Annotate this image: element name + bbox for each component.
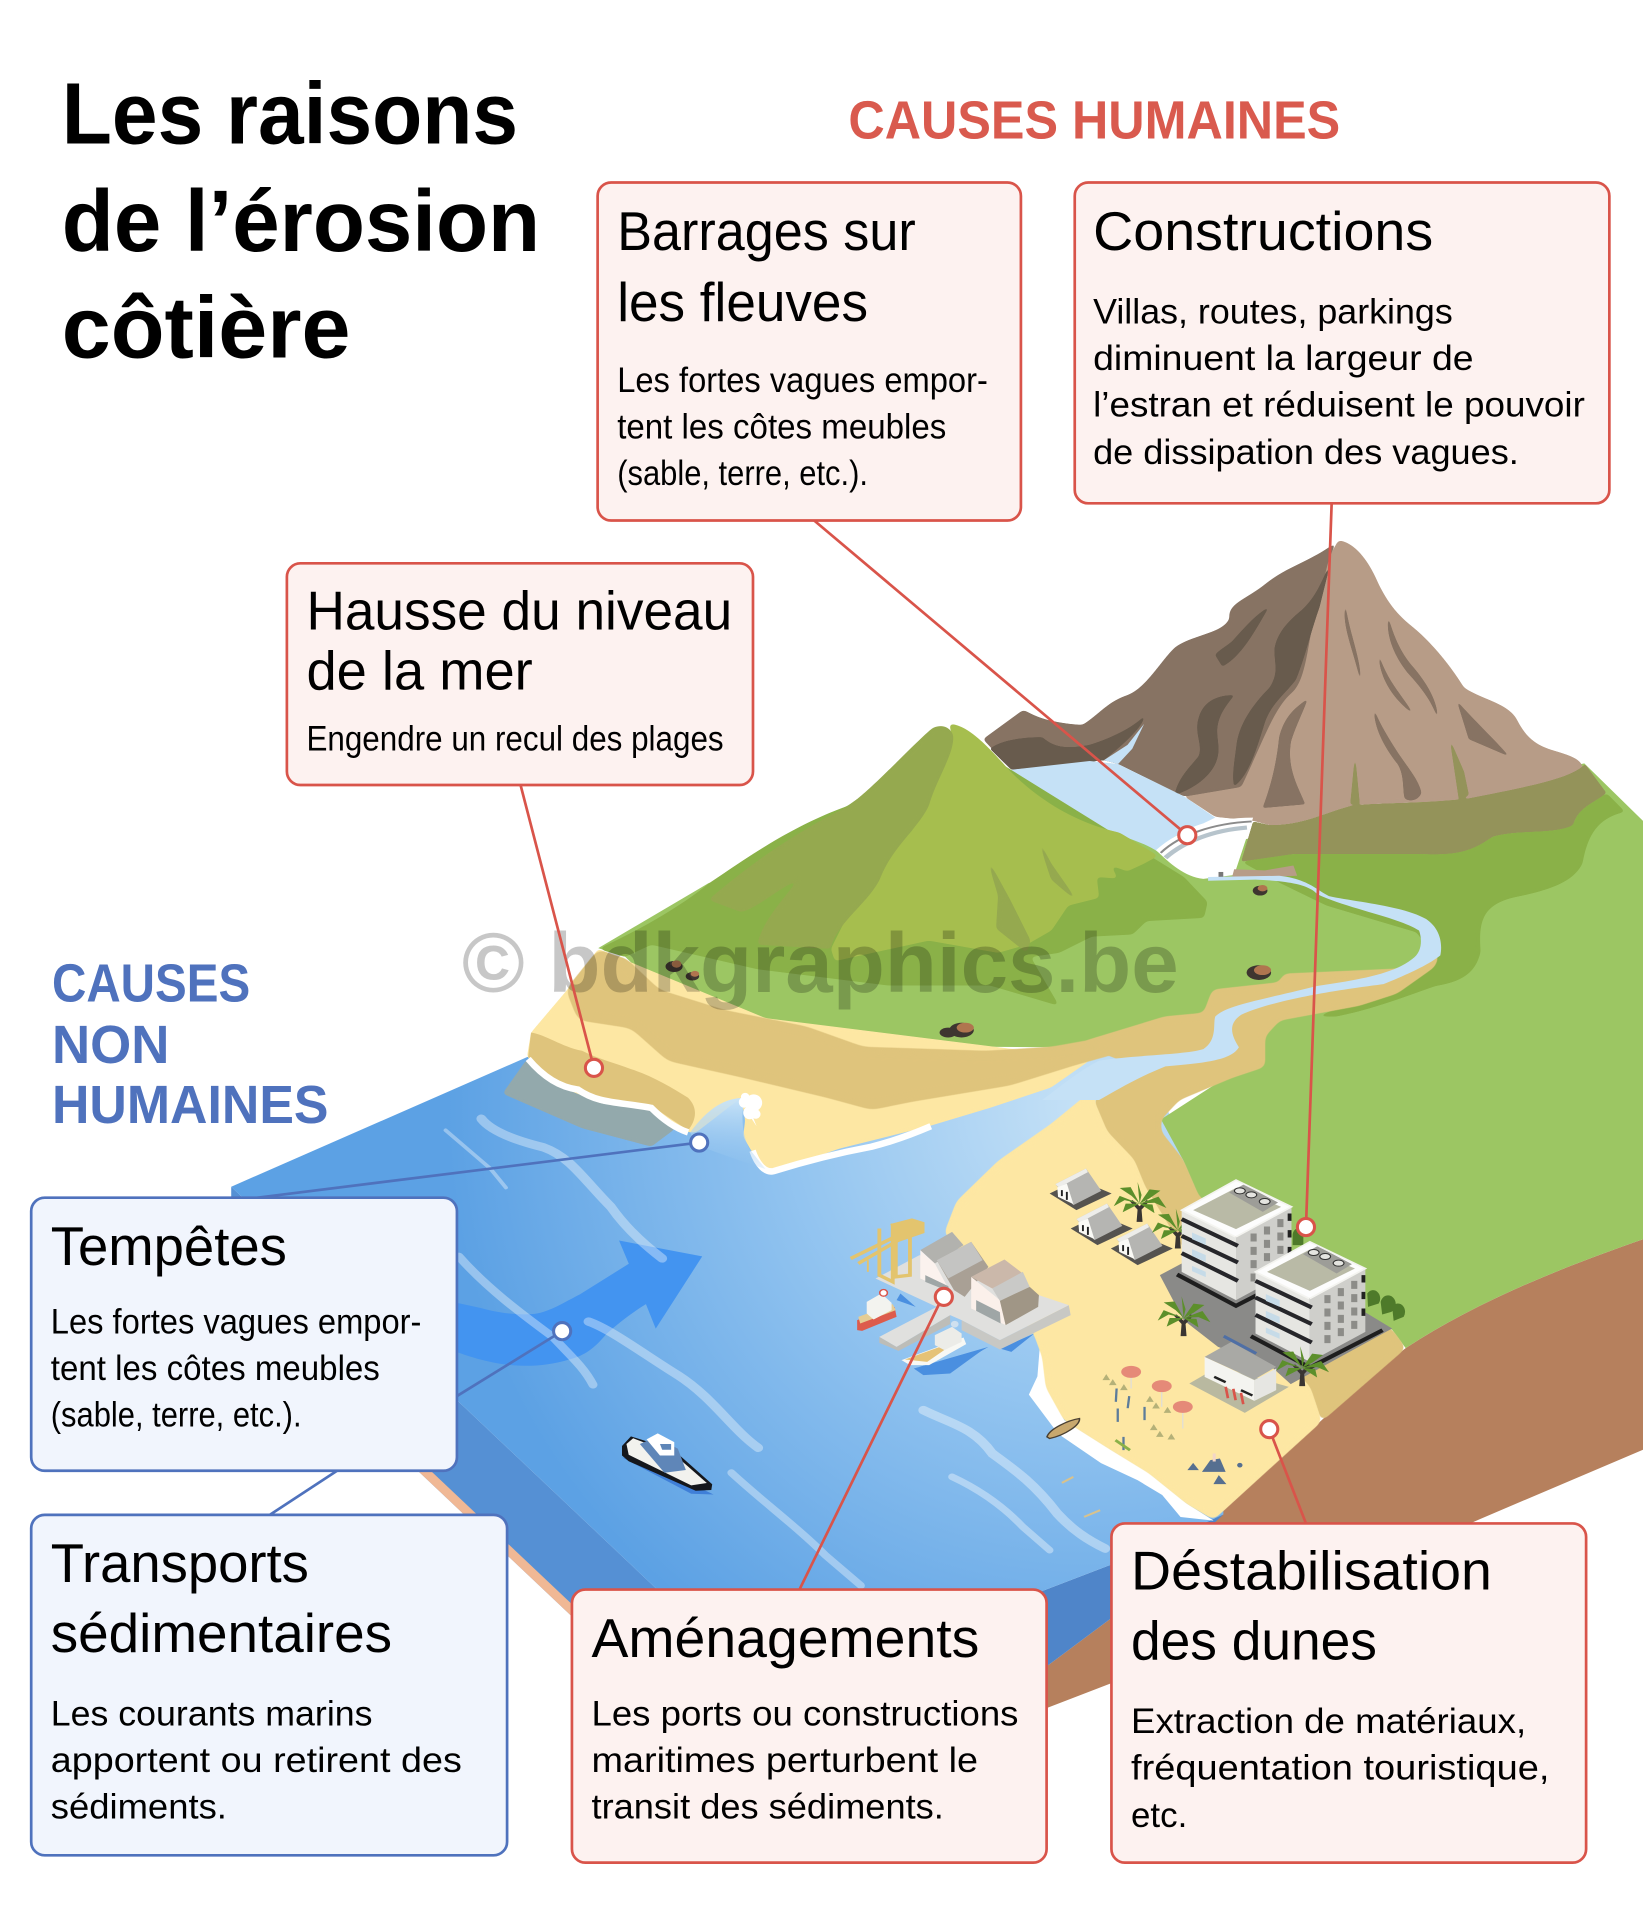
moored barge: [902, 1321, 985, 1375]
panel: tempêtes: Tempêtes: [51, 1215, 287, 1277]
dark green slope: [1241, 793, 1625, 1017]
panel: aménagements: maritimes perturbent le: [592, 1740, 978, 1780]
swimmers: [1062, 1477, 1100, 1517]
palm trees: [1114, 1182, 1166, 1222]
river: [1042, 876, 1441, 1100]
olive mountain foot: [1241, 739, 1606, 862]
west sand: [527, 949, 1092, 1173]
heading: causes non humaines: [52, 954, 328, 1135]
palm by the car park: [1158, 1296, 1210, 1336]
rock patch below dam: [1232, 865, 1297, 878]
dark rock streaks: [990, 563, 1330, 795]
panel: constructions: de dissipation des vagues.: [1093, 432, 1519, 472]
panel: déstabilisation des dunes: fréquentation touristique,: [1131, 1747, 1549, 1787]
west tan dune band: [566, 949, 1149, 1110]
east beach: [944, 1067, 1321, 1519]
heading: causes non humaines: NON: [52, 1015, 169, 1075]
port sheds: [920, 1232, 1039, 1325]
wooden boat: [1047, 1419, 1080, 1439]
front sea cross-section: [770, 1515, 1223, 1762]
hill bright face: [831, 724, 1158, 961]
panel: barrages: Les fortes vagues empor-: [617, 360, 988, 400]
panel: aménagements: Aménagements: [592, 1607, 979, 1669]
palm by the shop: [1276, 1346, 1329, 1386]
peach sediment layer: [231, 1282, 770, 1803]
breaking wave: [690, 1093, 766, 1169]
title: [62, 65, 540, 377]
panel: constructions: Villas, routes, parkings: [1093, 291, 1453, 331]
speedboat: [622, 1433, 714, 1495]
panel: tempêtes: tent les côtes meubles: [51, 1348, 380, 1388]
east dune band: [1077, 952, 1440, 1422]
current arrow: [440, 1241, 702, 1366]
brown soil face: [783, 1239, 1643, 1811]
beach shop: [1189, 1336, 1289, 1413]
panel: tempêtes: [31, 1198, 457, 1471]
medium rock streaks: [1263, 603, 1509, 808]
sea surface: [231, 1050, 1223, 1696]
title: de l’érosion: [62, 173, 540, 270]
east surf: [1029, 1346, 1214, 1521]
boulders: [666, 885, 1271, 1037]
panel: transports sédimentaires: apportent ou retirent des: [51, 1740, 462, 1780]
hill dark green base: [598, 733, 1208, 1006]
title: côtière: [62, 280, 350, 377]
tan cliff at the coast: [528, 1032, 695, 1130]
panel: constructions: diminuent la largeur de: [1093, 338, 1474, 378]
base green land: [598, 763, 1643, 1348]
panel: transports sédimentaires: sédimentaires: [51, 1602, 392, 1664]
panel: hausse du niveau de la mer: Engendre un recul des plages: [306, 719, 724, 759]
reservoir lake: [1011, 724, 1215, 852]
hill olive shade: [708, 726, 1080, 953]
marker dots: [554, 827, 1315, 1438]
panel: constructions: l’estran et réduisent le pouvoir: [1093, 384, 1585, 424]
panel: transports sédimentaires: sédiments.: [51, 1787, 227, 1827]
panel: déstabilisation des dunes: Déstabilisation: [1131, 1540, 1492, 1602]
mountains, lake and dam: [983, 540, 1625, 1017]
heading: causes non humaines: HUMAINES: [52, 1075, 328, 1135]
connector lines: [258, 503, 1332, 1590]
houses: [1050, 1168, 1112, 1210]
panel: déstabilisation des dunes: Extraction de matériaux,: [1131, 1701, 1526, 1741]
panel: barrages: (sable, terre, etc.).: [617, 453, 868, 493]
panel: barrages: tent les côtes meubles: [617, 406, 946, 446]
panel: hausse du niveau de la mer: [287, 563, 753, 785]
panel: aménagements: transit des sédiments.: [592, 1787, 944, 1827]
panel: déstabilisation des dunes: des dunes: [1131, 1609, 1377, 1671]
panel: hausse du niveau de la mer: de la mer: [306, 639, 533, 701]
title: Les raisons: [62, 65, 518, 162]
panel: transports sédimentaires: Transports: [51, 1532, 309, 1594]
left cross-section of the sea block: [231, 1187, 770, 1803]
coastal scene illustration: [231, 540, 1643, 1811]
panel: aménagements: Les ports ou constructions: [592, 1693, 1018, 1733]
shrubs behind: [1293, 1228, 1405, 1321]
surf line: [528, 1059, 931, 1171]
apartment block rear: [1177, 1180, 1309, 1306]
panel: barrages: [598, 182, 1021, 520]
submerged grey rock: [502, 1059, 676, 1147]
light mountain face: [1184, 540, 1583, 825]
panel: barrages: les fleuves: [617, 271, 868, 333]
panel: barrages: Barrages sur: [617, 200, 916, 262]
dark mountain face: [983, 540, 1338, 797]
panel: tempêtes: (sable, terre, etc.).: [51, 1395, 302, 1435]
green hill: [502, 724, 1208, 1173]
panel: tempêtes: Les fortes vagues empor-: [51, 1302, 421, 1342]
dam: [1156, 818, 1253, 879]
beach rocks: [1187, 1454, 1243, 1484]
panel: transports sédimentaires: Les courants marins: [51, 1693, 373, 1733]
panel: constructions: [1075, 182, 1609, 503]
heading: causes humaines: CAUSES HUMAINES: [848, 90, 1340, 150]
beach umbrellas and sunbeds: [1102, 1366, 1193, 1450]
car park: [1160, 1263, 1392, 1384]
panel: hausse du niveau de la mer: Hausse du niveau: [306, 579, 732, 641]
watermark: © bdkgraphics.be: [462, 916, 1179, 1010]
sea foam streaks: [446, 1119, 861, 1586]
beach town and port: [851, 1168, 1405, 1517]
port platform: [876, 1255, 1071, 1351]
panel: déstabilisation des dunes: etc.: [1131, 1795, 1187, 1835]
heading: causes non humaines: CAUSES: [52, 954, 250, 1014]
panel: déstabilisation des dunes: [1111, 1523, 1586, 1863]
panel: transports sédimentaires: [31, 1515, 507, 1855]
port water shadow: [897, 1293, 1034, 1374]
moored ship: [857, 1289, 897, 1331]
port crane: [851, 1220, 923, 1282]
apartment block front: [1251, 1242, 1383, 1368]
panel: constructions: Constructions: [1093, 200, 1433, 262]
panel: aménagements: [572, 1590, 1047, 1863]
